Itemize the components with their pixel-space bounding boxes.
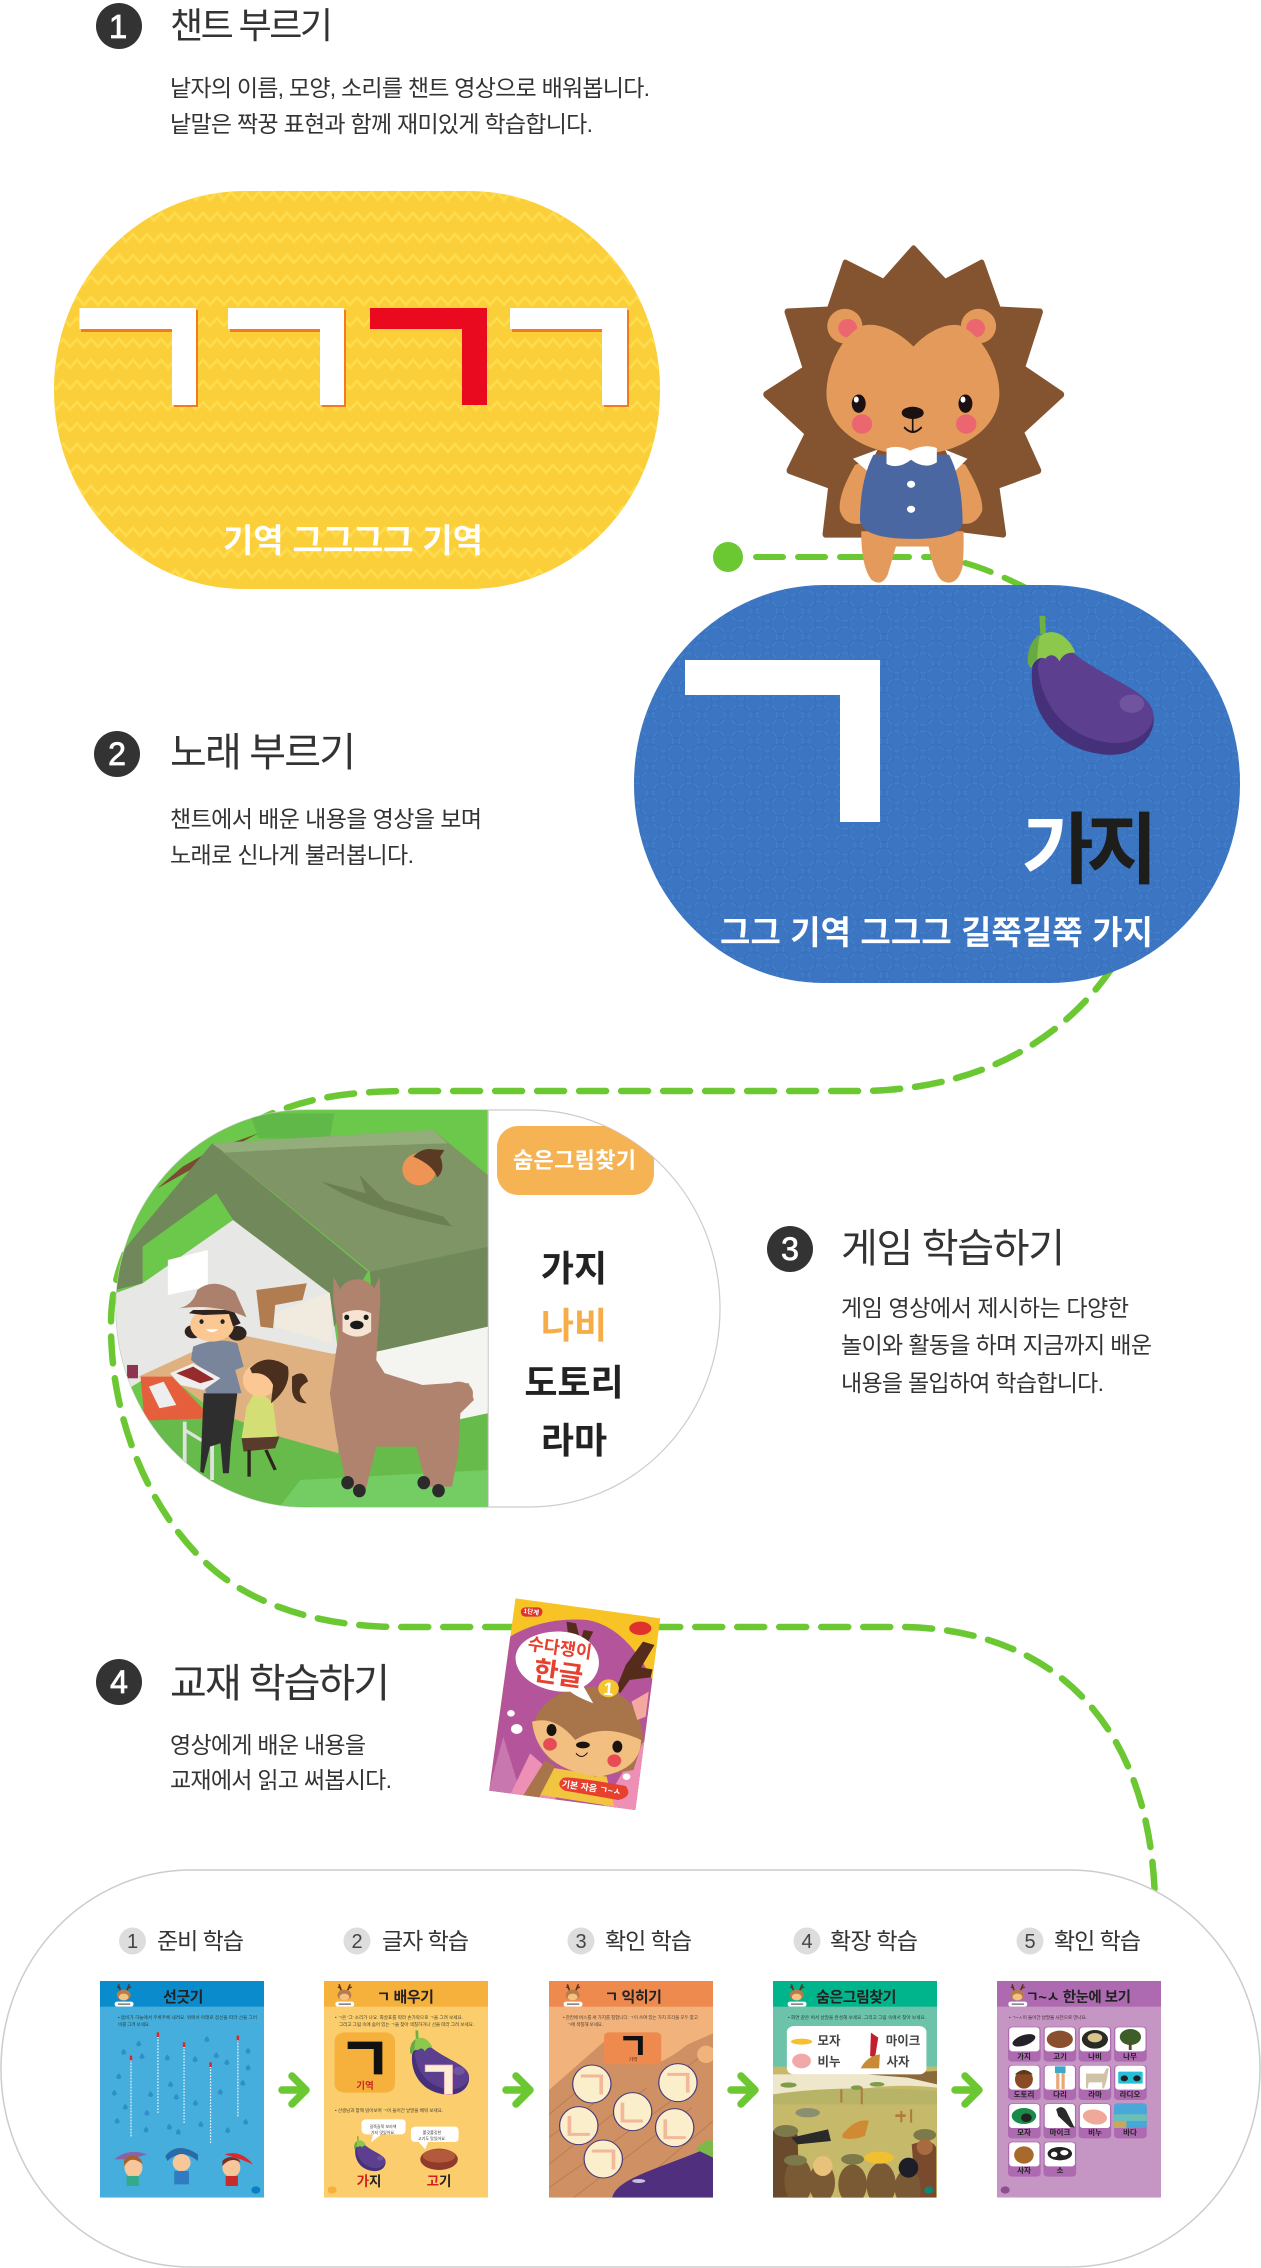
page 5: overview learning: 다리 — [1053, 2089, 1067, 2099]
hedgehog mascot — [766, 249, 1062, 583]
step 1 number badge: 1 — [109, 8, 127, 45]
page 2: letter learning: 고기 — [427, 2174, 451, 2189]
page 3: check learning: ㄱ에 색칠해 보세요. — [567, 2021, 603, 2028]
page 4: extension learning: • 화면 같은 써서 낱말을 완성해 보세요. 그리고 그림 속에서 찾아 보세요. — [788, 2014, 926, 2021]
page 5: overview learning: 비누 — [1088, 2127, 1102, 2137]
step labels: 확인 학습 — [605, 1928, 692, 1954]
dashed path: start dot to blue pill — [713, 542, 1030, 590]
step 2 description — [170, 806, 482, 868]
page 5: overview learning: 모자 — [1017, 2128, 1031, 2137]
eggplant — [1028, 616, 1154, 755]
page 5: overview learning: 도토리 — [1014, 2090, 1034, 2099]
step 2 number badge: 2 — [108, 736, 126, 772]
shadowed giyeok letters — [80, 308, 629, 407]
page 5: overview learning: 고기 — [1053, 2051, 1067, 2061]
game title badge — [497, 1126, 654, 1195]
page 2: letter learning — [324, 1981, 488, 2198]
workbook cover: 수다쟁이 — [527, 1634, 593, 1662]
panel: hidden picture game: 숨은그림찾기 — [513, 1148, 636, 1173]
step labels: 글자 학습 — [382, 1928, 469, 1954]
word list — [524, 1248, 624, 1461]
song lyric: 그그 기역 그그그 길쭉길쭉 가지 — [720, 914, 1153, 951]
page 5: overview learning: 가지 — [1017, 2051, 1031, 2061]
page 3: check learning: 기역 — [629, 2056, 637, 2063]
page 3: check learning: ㄱ 익히기 — [605, 1989, 661, 2006]
page 5: overview learning: 라마 — [1088, 2090, 1102, 2099]
page 5: overview learning: ㄱ~ㅅ 한눈에 보기 — [1026, 1989, 1130, 2006]
word gaji: 가지 — [1022, 806, 1158, 894]
page 2: letter learning: 기역 — [356, 2080, 374, 2092]
page 4: extension learning: 비누 — [817, 2055, 841, 2069]
page 4: extension learning — [773, 1981, 937, 2206]
word list: 라마 — [541, 1420, 607, 1461]
panel: hidden picture game — [111, 1107, 720, 1510]
step 3 number badge: 3 — [781, 1231, 799, 1267]
step 3 number badge — [767, 1226, 813, 1272]
step labels: 4 — [801, 1931, 813, 1953]
step 2 number badge — [94, 731, 140, 777]
step 1 description: 낱말은 짝꿍 표현과 함께 재미있게 학습합니다. — [170, 111, 593, 137]
step 4 description: 교재에서 읽고 써봅시다. — [170, 1767, 392, 1793]
workbook cover: 1 — [603, 1679, 614, 1699]
game scene illustration — [111, 1107, 488, 1510]
step 3 heading: 게임 학습하기 — [841, 1227, 1065, 1271]
page 5: overview learning: 라디오 — [1120, 2090, 1140, 2099]
page 2: letter learning: • 선생님과 함께 읽어보며 ㄱ이 들어간 낱말을 배워 보세요. — [335, 2107, 443, 2114]
dashed path: blue pill through to bottom panel — [111, 968, 1155, 1900]
page 2: letter learning: 가지 — [357, 2174, 381, 2189]
page 5: overview learning: 마이크 — [1050, 2127, 1070, 2137]
page 5: overview learning: 나비 — [1088, 2051, 1102, 2061]
step labels: 확인 학습 — [1054, 1928, 1141, 1954]
step labels: 준비 학습 — [157, 1928, 244, 1954]
page 5: overview learning: • ㄱ~ㅅ이 들어간 낱말을 사전으로 만나요. — [1009, 2014, 1087, 2021]
step labels — [119, 1928, 1141, 1954]
page 2: letter learning: 길쭉길쭉 보라색 — [370, 2123, 397, 2129]
page 4: extension learning: 숨은그림찾기 — [816, 1989, 896, 2006]
page 2: letter learning: 쫄깃쫄깃한 — [423, 2129, 442, 2135]
arrow — [506, 2076, 530, 2104]
page 2: letter learning: 가지 맛있어요. — [371, 2129, 395, 2135]
page 5: overview learning: 바다 — [1123, 2127, 1137, 2137]
step 4 heading: 교재 학습하기 — [170, 1662, 390, 1706]
page 1: line tracing: 선긋기 — [163, 1989, 203, 2006]
page 4: extension learning: 마이크 — [886, 2034, 920, 2048]
step 4 number badge: 4 — [110, 1664, 128, 1700]
step 3 description: 게임 영상에서 제시하는 다양한 — [841, 1295, 1129, 1321]
word list: 도토리 — [524, 1362, 624, 1403]
page 3: check learning: • 찬칸에 버스를 써 가지를 칠합니다. ㄱ이 쓰여 있는 가지 조각을 모두 찾고 — [563, 2014, 698, 2021]
step 1 heading: 챈트 부르기 — [170, 5, 333, 46]
page 1: line tracing: • 봄비가 하늘에서 주룩주룩 내려요. 위에서 아래로 점선을 따라 선을 그어 — [118, 2014, 257, 2021]
panel: yellow chant video — [54, 191, 660, 589]
page 1: line tracing: 비를 그려 보세요. — [118, 2021, 150, 2028]
page 4: extension learning: 사자 — [886, 2055, 910, 2069]
step 2 heading: 노래 부르기 — [170, 731, 356, 775]
step 4 description — [170, 1732, 392, 1793]
step labels: 확장 학습 — [830, 1928, 918, 1954]
workbook cover — [488, 1598, 660, 1813]
workbook cover: 1단계 — [523, 1606, 540, 1617]
chant lyric: 기역 그그그그 기역 — [223, 522, 483, 559]
step 4 number badge — [96, 1659, 142, 1705]
workbook cover: 한글 — [532, 1656, 585, 1692]
panel: workbook steps — [1, 1870, 1260, 2267]
arrow — [731, 2076, 755, 2104]
page 5: overview learning: 소 — [1057, 2166, 1064, 2175]
page 1: line tracing — [100, 1981, 264, 2198]
page 2: letter learning: 고기도 맛있어요. — [418, 2135, 446, 2141]
step 2 description: 챈트에서 배운 내용을 영상을 보며 — [170, 806, 482, 832]
big giyeok — [685, 660, 880, 822]
step labels: 3 — [575, 1931, 587, 1953]
step 3 description — [841, 1295, 1152, 1396]
page 3: check learning — [549, 1981, 715, 2198]
word list: 가지 — [541, 1248, 607, 1289]
step labels: 1 — [127, 1931, 138, 1953]
page 5: overview learning: 나무 — [1123, 2051, 1137, 2061]
step 2 description: 노래로 신나게 불러봅니다. — [170, 842, 414, 868]
arrow — [282, 2076, 306, 2104]
step 1 number badge — [96, 3, 142, 49]
page 5: overview learning: 사자 — [1017, 2165, 1031, 2175]
step 3 description: 내용을 몰입하여 학습합니다. — [841, 1370, 1104, 1396]
step 1 description: 낱자의 이름, 모양, 소리를 챈트 영상으로 배워봅니다. — [170, 75, 650, 101]
step labels: 5 — [1024, 1931, 1036, 1953]
word list: 나비 — [541, 1305, 607, 1346]
page 2: letter learning: • ㄱ은 '그' 소리가 나요. 화살표를 따라 손가락으로 ㄱ을 그려 보세요. — [335, 2014, 463, 2021]
arrow — [955, 2076, 979, 2104]
page 5: overview learning — [997, 1981, 1161, 2198]
step labels: 2 — [351, 1931, 363, 1953]
page 4: extension learning: 모자 — [817, 2034, 841, 2048]
page 2: letter learning: ㄱ 배우기 — [377, 1989, 433, 2006]
page 2: letter learning: 그리고 그림 속에 숨어 있는 ㄱ을 찾아 색칠하거나 선을 따라 그려 보세요. — [339, 2021, 474, 2028]
step 4 description: 영상에게 배운 내용을 — [170, 1732, 366, 1758]
step 3 description: 놀이와 활동을 하며 지금까지 배운 — [841, 1332, 1152, 1358]
step 1 description — [170, 75, 650, 137]
panel: blue song video — [634, 585, 1240, 983]
workbook cover: 기본 자음 ㄱ~ㅅ — [561, 1778, 622, 1797]
